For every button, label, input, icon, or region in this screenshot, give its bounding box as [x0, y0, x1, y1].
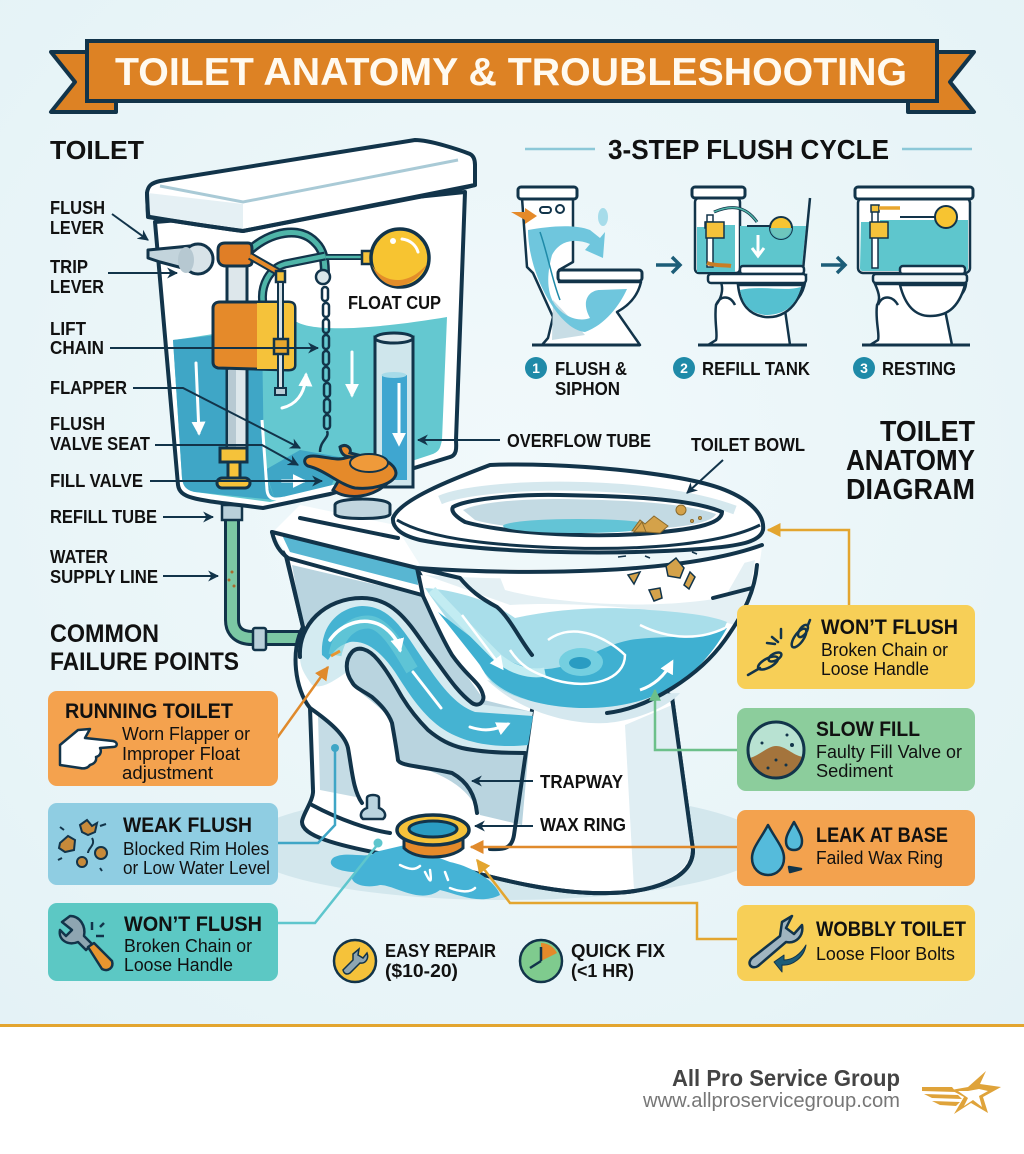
card: running toilet: adjustment [122, 763, 213, 783]
card: weak flush: Blocked Rim Holes [123, 839, 269, 859]
step 2 label: 2 [680, 360, 688, 376]
part labels: FILL VALVE [50, 471, 143, 491]
card: won't flush right: Broken Chain or [821, 640, 948, 660]
tank water left dark [173, 330, 275, 500]
teal refill tubes [250, 233, 362, 304]
bowl body [418, 545, 762, 714]
part labels: VALVE SEAT [50, 434, 150, 454]
heading: common failure points [50, 620, 239, 676]
tank water teal [173, 317, 447, 502]
trapway water [300, 596, 533, 760]
wax ring and puddle [331, 815, 500, 899]
flapper [305, 446, 396, 518]
legend: easy repair [334, 940, 496, 982]
part labels: TRIP [50, 257, 88, 277]
card: won't flush left: Loose Handle [124, 955, 233, 975]
step 1 label: 1 [532, 360, 540, 376]
title banner: TOILET ANATOMY & TROUBLESHOOTING [115, 51, 907, 94]
footer company: All Pro Service Group [672, 1065, 900, 1091]
part labels: TOILET BOWL [691, 435, 805, 455]
icon: wrench and arrow [750, 916, 806, 972]
legend: quick fix: (<1 HR) [571, 961, 634, 981]
part labels: SUPPLY LINE [50, 567, 158, 587]
step 1 toilet [511, 187, 642, 345]
card: running toilet [48, 691, 278, 786]
part labels: LEVER [50, 218, 104, 238]
water arrows [196, 352, 352, 481]
step arrow 1 [656, 257, 680, 273]
trip arm [250, 256, 278, 272]
tank lid [147, 140, 475, 231]
tank water bottom [265, 450, 345, 500]
water in opening [503, 519, 653, 533]
card: running toilet: Improper Float [122, 744, 240, 764]
icon: sediment [748, 722, 804, 778]
part labels: FLUSH [50, 414, 105, 434]
heading: toilet anatomy diagram [846, 416, 975, 506]
legend: quick fix: QUICK FIX [571, 941, 665, 961]
card: slow fill [737, 708, 975, 791]
debris in bowl [632, 505, 702, 533]
step 1 water [528, 226, 627, 332]
step 1 label [525, 357, 627, 399]
icon: broken chain [748, 620, 810, 675]
card: weak flush: WEAK FLUSH [123, 814, 252, 837]
card: leak at base: Failed Wax Ring [816, 848, 943, 868]
part labels: OVERFLOW TUBE [507, 431, 651, 451]
card: slow fill: Faulty Fill Valve or [816, 742, 962, 762]
channel top line [417, 568, 532, 655]
heading: toilet anatomy diagram: ANATOMY [846, 445, 975, 477]
card: wobbly toilet [737, 905, 975, 981]
toilet base and bowl [272, 505, 762, 893]
card: leak at base [737, 810, 975, 886]
bolt [361, 795, 385, 819]
tank [155, 192, 465, 508]
part labels: FLUSH [50, 198, 105, 218]
card: weak flush [48, 803, 278, 885]
card: won't flush right [737, 605, 975, 689]
step 1 tank and leg [522, 198, 641, 345]
heading: toilet: TOILET [50, 135, 144, 165]
heading: toilet anatomy diagram: DIAGRAM [846, 474, 975, 506]
icon: clock [541, 943, 557, 961]
card: running toilet: Worn Flapper or [122, 724, 250, 744]
legend: easy repair: EASY REPAIR [385, 941, 496, 961]
bowl rim shading [425, 560, 755, 625]
icon: debris [58, 820, 107, 871]
card: slow fill: SLOW FILL [816, 718, 920, 741]
part labels [50, 198, 805, 835]
valve cap [218, 243, 252, 266]
toilet body silhouette [285, 552, 693, 893]
step arrow 2 [821, 257, 845, 273]
bowl water [425, 588, 727, 708]
part labels: LEVER [50, 277, 104, 297]
tank inner white line [262, 420, 335, 499]
card: running toilet: RUNNING TOILET [65, 700, 233, 723]
icon: pointing hand [60, 729, 117, 768]
step 3 label: 3 [860, 360, 868, 376]
step 1 label: SIPHON [555, 379, 620, 399]
bowl outline [607, 565, 757, 713]
legend: quick fix [520, 940, 665, 982]
heading: common failure points: FAILURE POINTS [50, 648, 239, 676]
pedestal right shading [625, 705, 691, 890]
fill valve [213, 243, 295, 488]
legend: easy repair: ($10-20) [385, 961, 458, 981]
card: won't flush left: Broken Chain or [124, 936, 252, 956]
bowl underside band [487, 680, 680, 723]
connector lines: failures [277, 530, 849, 939]
valve body [213, 302, 295, 370]
flush lever [148, 244, 213, 274]
tank body [155, 192, 465, 508]
card: slow fill: Sediment [816, 761, 893, 781]
icon: water drops [752, 822, 802, 875]
step 3 toilet [855, 187, 973, 345]
title banner [51, 41, 974, 112]
seat opening [452, 495, 722, 535]
card: won't flush right: Loose Handle [821, 659, 929, 679]
toilet seat [393, 464, 763, 552]
part labels: TRAPWAY [540, 772, 623, 792]
step 1 shaded leg [552, 300, 585, 340]
step 1 label: FLUSH & [555, 359, 627, 379]
lift chain [316, 270, 330, 452]
heading: common failure points: COMMON [50, 620, 159, 648]
step labels [525, 357, 956, 399]
part labels: CHAIN [50, 338, 104, 358]
card: wobbly toilet: Loose Floor Bolts [816, 944, 955, 964]
bowl white highlight [498, 562, 745, 604]
step 3 label [853, 357, 956, 379]
part labels: LIFT [50, 319, 86, 339]
lower shaded wall [318, 715, 356, 797]
shaded inner body [292, 565, 532, 825]
card: won't flush left [48, 903, 278, 981]
part labels: REFILL TUBE [50, 507, 157, 527]
footer url: www.allproservicegroup.com [642, 1090, 900, 1112]
float ball [362, 229, 429, 287]
debris on rim [618, 552, 697, 601]
step 3 label: RESTING [882, 359, 956, 379]
pedestal edge lines [310, 697, 693, 893]
card: weak flush: or Low Water Level [123, 858, 270, 878]
card: wobbly toilet: WOBBLY TOILET [816, 918, 966, 941]
heading: toilet anatomy diagram: TOILET [880, 416, 975, 448]
part labels: WAX RING [540, 815, 626, 835]
step 2 label: REFILL TANK [702, 359, 810, 379]
bowl interior [463, 499, 716, 531]
icon: wrench [60, 916, 112, 970]
icon: wrench small [343, 949, 368, 974]
logo star [922, 1071, 1001, 1114]
gold fittings [220, 448, 247, 462]
overflow tube [375, 333, 413, 487]
card: won't flush right: WON’T FLUSH [821, 616, 958, 639]
footer [0, 1024, 1024, 1154]
part labels: WATER [50, 547, 108, 567]
card: leak at base: LEAK AT BASE [816, 824, 948, 847]
floor shadow [243, 790, 767, 900]
step 2 toilet [692, 187, 810, 345]
step 2 label [673, 357, 810, 379]
rim [272, 505, 762, 627]
part labels: FLAPPER [50, 378, 127, 398]
heading: flush cycle: 3-STEP FLUSH CYCLE [608, 134, 889, 165]
water supply line [222, 505, 305, 650]
card: won't flush left: WON’T FLUSH [124, 913, 262, 936]
float cup label: FLOAT CUP [348, 293, 441, 313]
arrows: part labels [108, 214, 723, 826]
